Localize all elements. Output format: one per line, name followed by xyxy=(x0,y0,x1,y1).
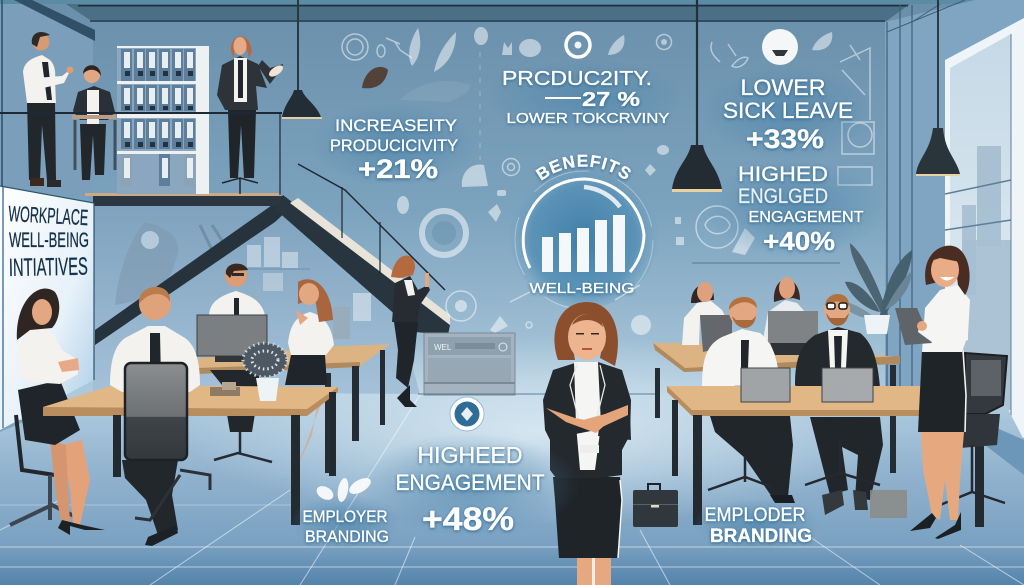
chart label: WELL-BEING xyxy=(530,280,634,297)
emblem: bottom engagement xyxy=(450,397,484,431)
background wall xyxy=(0,0,1024,420)
well-being sign panel xyxy=(0,186,94,430)
stat: highed engagement bottom xyxy=(360,433,580,537)
benefits dial chart xyxy=(514,154,654,308)
stat: highed engagement: ENGLGED xyxy=(738,185,828,208)
credenza xyxy=(424,333,515,395)
stat: lower sick leave: +33% xyxy=(746,124,824,154)
stairs woman xyxy=(391,255,430,407)
mezzanine floor xyxy=(85,193,283,206)
stat: employer branding right: EMPLODER xyxy=(704,505,806,526)
stat: highed engagement bottom: HIGHEED xyxy=(418,442,522,468)
far woman two xyxy=(763,277,807,340)
stat: increased productivity xyxy=(310,103,480,187)
stair emblem xyxy=(446,291,508,333)
wall icons: upper right xyxy=(692,29,874,263)
stat: highed engagement bottom: +48% xyxy=(422,501,514,537)
stat: increased productivity: INCREASEITY xyxy=(335,116,457,135)
title xyxy=(8,201,89,282)
seated woman left xyxy=(17,289,105,535)
title: INTIATIVES xyxy=(9,253,88,282)
stat: productivity lower: 27 % xyxy=(582,89,640,111)
filing shelf with binders xyxy=(117,46,209,194)
stat: lower sick leave: LOWER xyxy=(740,75,826,100)
bar chart xyxy=(542,215,625,272)
floor xyxy=(0,392,1024,585)
bearded man left xyxy=(702,297,795,503)
wall art under mezzanine xyxy=(115,222,371,321)
back desk left xyxy=(198,344,390,473)
credenza: WEL xyxy=(434,343,452,352)
stat: highed engagement bottom: ENGAGEMENT xyxy=(396,470,544,495)
chair right xyxy=(940,353,1007,505)
stat: employer branding left: BRANDING xyxy=(305,527,389,546)
stat: increased productivity: PRODUCICIVITY xyxy=(330,136,458,155)
lower staircase support xyxy=(95,203,290,345)
stat: increased productivity: +21% xyxy=(358,154,438,184)
back seated man xyxy=(209,264,272,462)
wall floor line xyxy=(418,393,660,395)
man with glasses xyxy=(795,294,883,515)
stat: employer branding right: BRANDING xyxy=(710,526,812,547)
floor highlight xyxy=(180,335,900,525)
stat: employer branding left: EMPLOYER xyxy=(302,508,388,526)
big desk right xyxy=(667,386,990,527)
lamp: left xyxy=(282,0,322,119)
left wall xyxy=(0,0,93,200)
back woman on phone xyxy=(285,279,350,470)
balcony standing woman xyxy=(217,36,285,194)
stat: lower sick leave: SICK LEAVE xyxy=(723,98,853,123)
desk items xyxy=(210,382,240,396)
front laptops xyxy=(741,368,873,402)
back laptops xyxy=(700,311,818,355)
title: WORKPLACE xyxy=(8,201,89,230)
stat: employer branding left xyxy=(290,475,400,550)
lamp: centre xyxy=(672,0,722,192)
stat: highed engagement: +40% xyxy=(763,226,835,256)
stat: highed engagement: HIGHED xyxy=(738,163,828,186)
central woman xyxy=(543,302,631,585)
chair bases right xyxy=(708,440,880,490)
lamp: right xyxy=(916,0,960,176)
stat: highed engagement: ENGAGEMENT xyxy=(748,209,864,226)
wall icons: middle xyxy=(397,145,684,255)
wall icons: upper middle xyxy=(342,27,672,160)
stat: employer branding right xyxy=(692,499,822,551)
wall under mezzanine xyxy=(93,205,420,394)
office chair back left xyxy=(125,363,210,520)
stat: productivity lower: LOWER TOKCRVINY xyxy=(506,111,670,127)
desk plant xyxy=(243,343,287,401)
plant right xyxy=(837,243,912,334)
back monitor xyxy=(197,315,267,362)
upper staircase xyxy=(276,164,450,335)
balcony man xyxy=(23,32,74,187)
back desk right xyxy=(653,343,900,473)
benefits heading: BENEFITS xyxy=(534,154,632,182)
far woman one xyxy=(682,282,725,345)
icon: leaves xyxy=(314,475,373,503)
right wall xyxy=(885,0,1024,440)
ceiling xyxy=(0,0,1024,190)
stat: productivity lower: PRCDUC2ITY. xyxy=(502,68,652,90)
floor tiles xyxy=(0,395,1024,585)
big desk left xyxy=(43,385,338,525)
balcony seated woman xyxy=(72,65,116,180)
briefcase xyxy=(633,484,678,527)
small wall flowers xyxy=(510,285,651,335)
stat: productivity lower xyxy=(485,59,685,135)
window with skyline xyxy=(945,18,1024,438)
central man left xyxy=(110,287,200,546)
floor box xyxy=(870,490,907,518)
right floor shadow xyxy=(985,425,1024,475)
stat: highed engagement xyxy=(705,158,885,258)
standing woman right xyxy=(895,246,970,539)
stat: lower sick leave xyxy=(699,64,875,160)
balcony railing xyxy=(0,113,282,195)
title: WELL-BEING xyxy=(9,229,89,252)
front chair left woman xyxy=(10,415,78,525)
